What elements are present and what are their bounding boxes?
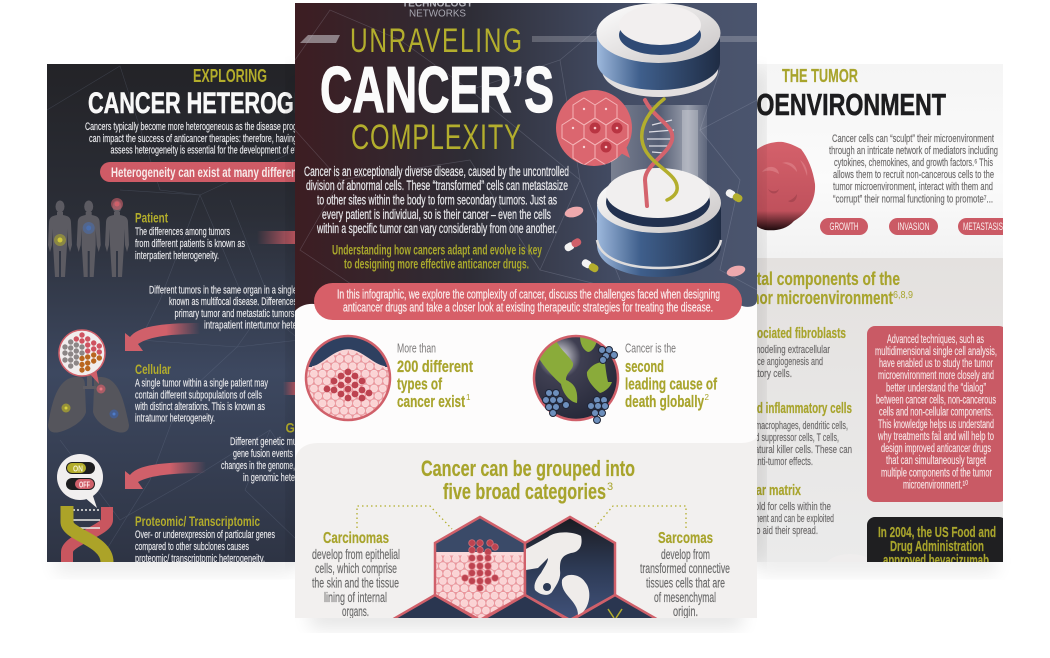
dotted connectors bbox=[357, 506, 686, 529]
text block: sarcomas: Sarcomas bbox=[658, 530, 713, 547]
heading: vital components: 6,8,9 bbox=[893, 290, 913, 301]
illustration: dna helix bbox=[642, 99, 677, 206]
text block: genetic: in genomic hete bbox=[243, 472, 295, 484]
key message: Understanding how cancers adapt and evolve is key bbox=[332, 242, 542, 258]
text block: extracellular matrix: A scaffold for cells within the bbox=[731, 501, 831, 513]
text block: fibroblasts: Cancer-associated fibroblasts bbox=[703, 326, 846, 342]
intro text bbox=[829, 133, 998, 206]
network mesh bbox=[295, 10, 757, 295]
text block: carcinomas: organs. bbox=[342, 604, 369, 619]
text block: patient: interpatient heterogeneity. bbox=[135, 250, 219, 262]
intro text: Cancer is an exceptionally diverse disease, caused by the uncontrolled bbox=[304, 164, 569, 179]
text block: cellular: Cellular bbox=[135, 361, 171, 377]
text block: tissue: known as multifocal disease. Differences bbox=[169, 296, 297, 308]
banner: heterogeneity levels: Heterogeneity can exist at many differen bbox=[111, 165, 297, 180]
stat: 200 types of cancer: 200 different bbox=[397, 357, 473, 376]
heading: five broad categories: 3 bbox=[607, 481, 613, 493]
text block: fibroblasts: matrix, induce angiogenesis and bbox=[720, 356, 823, 368]
heading: vital components: tumor microenvironment bbox=[735, 288, 893, 308]
arrow: genetic to proteomic bbox=[125, 462, 206, 489]
callout: advanced techniques: multiple components of the tumor bbox=[881, 468, 992, 480]
arrow stub: patient bbox=[257, 231, 297, 244]
icon: tumor cell bbox=[757, 142, 816, 230]
banner: infographic scope: In this infographic, we explore the complexity of cancer, discuss the challenges faced when designing bbox=[337, 286, 720, 302]
text block: cellular: contain different subpopulations of cells bbox=[135, 390, 262, 402]
stat: second leading cause of death: second bbox=[625, 357, 664, 376]
text block: carcinomas: cells, which comprise bbox=[315, 561, 397, 576]
banner: infographic scope bbox=[314, 283, 742, 320]
text block: sarcomas: transformed connective bbox=[640, 561, 730, 576]
stat: 200 types of cancer: cancer exist bbox=[397, 392, 465, 411]
logo: technology networks bbox=[404, 3, 471, 16]
text block: genetic: changes in the genome, bbox=[221, 460, 295, 472]
intro text bbox=[304, 164, 569, 236]
callout: advanced techniques: microenvironment.¹⁰ bbox=[903, 480, 968, 492]
text block: immune cells: myeloid suppressor cells, T cells, bbox=[735, 432, 839, 444]
banner: infographic scope: anticancer drugs and take a closer look at existing therapeutic strategies for treating the disease. bbox=[343, 300, 713, 314]
left panel background bbox=[47, 64, 297, 562]
text block: proteomic transcriptomic: compared to other subclones causes bbox=[135, 541, 249, 553]
panel: five broad categories bbox=[295, 437, 757, 658]
text block: tissue: Different tumors in the same organ in a single bbox=[149, 284, 297, 296]
text block: proteomic transcriptomic: Proteomic/ Transcriptomic bbox=[135, 513, 260, 529]
icon: lungs with magnified tumor cells bbox=[48, 330, 129, 433]
intro text: within a specific tumor can vary considerably from one another. bbox=[316, 221, 557, 236]
icon: tissue with tumor bbox=[305, 335, 391, 421]
heading: five broad categories bbox=[421, 456, 635, 504]
stat: 200 types of cancer: More than bbox=[397, 342, 436, 356]
heading: the tumor: THE TUMOR bbox=[782, 66, 858, 86]
text block: carcinomas: lining of internal bbox=[324, 590, 387, 605]
logo: technology networks: NETWORKS bbox=[409, 8, 466, 20]
text block: immune cells: and natural killer cells. These can bbox=[735, 444, 852, 456]
stat: second leading cause of death: Cancer is the bbox=[625, 342, 676, 356]
text block: immune cells: have anti-tumor effects. bbox=[735, 456, 813, 468]
pills: growth invasion metastasis: INVASION bbox=[898, 221, 930, 233]
stat: second leading cause of death: death globally bbox=[625, 392, 704, 411]
shadow: side and centre cards bbox=[55, 548, 997, 628]
text block: genetic: gene fusion events bbox=[233, 448, 293, 460]
title: CANCER’S bbox=[320, 53, 554, 126]
callout: advanced techniques: design improved anticancer drugs bbox=[881, 443, 991, 455]
text block: fibroblasts bbox=[757, 326, 846, 380]
text block: carcinomas bbox=[312, 530, 400, 619]
decorative title stripes bbox=[300, 35, 757, 43]
text block: carcinomas: Carcinomas bbox=[323, 530, 389, 547]
text block: immune cells: Include macrophages, dendritic cells, bbox=[730, 420, 848, 432]
text block: patient: from different patients is known as bbox=[135, 238, 245, 250]
icon: bubble with cell hexagons bbox=[556, 90, 632, 166]
stat: second leading cause of death bbox=[625, 342, 717, 411]
text block: fibroblasts: Aid in remodeling extracellular bbox=[725, 344, 830, 356]
key message: to designing more effective anticancer drugs. bbox=[344, 256, 529, 272]
stat: second leading cause of death: 2 bbox=[704, 393, 710, 402]
stat: 200 types of cancer: types of bbox=[397, 374, 442, 394]
hexagon: sarcoma bone bbox=[525, 517, 615, 620]
icon: three human silhouettes bbox=[48, 198, 129, 277]
network mesh bbox=[47, 66, 300, 560]
text block: proteomic transcriptomic: Over- or underexpression of particular genes bbox=[135, 529, 275, 541]
pills: growth invasion metastasis: GROWTH bbox=[830, 221, 859, 233]
text block: sarcomas: tissues cells that are bbox=[646, 576, 725, 590]
hexagon row below bbox=[390, 595, 660, 658]
title: COMPLEXITY bbox=[351, 118, 521, 157]
heading: five broad categories: five broad categories bbox=[443, 479, 606, 504]
panel: the tumor microenvironment bbox=[757, 64, 1003, 562]
panel: unraveling cancer's complexity bbox=[295, 0, 757, 658]
icon: on off toggles speech bubble: ON bbox=[73, 464, 83, 474]
text block: sarcomas: of mesenchymal bbox=[654, 590, 716, 605]
icon: on off toggles speech bubble: OFF bbox=[79, 480, 90, 490]
decorative bump at bottom bbox=[826, 554, 874, 578]
text block: immune cells bbox=[757, 402, 852, 466]
callout: advanced techniques bbox=[867, 326, 1007, 502]
title bbox=[320, 22, 554, 157]
text block: extracellular matrix bbox=[757, 484, 834, 537]
callout: advanced techniques: that can simultaneously target bbox=[886, 455, 987, 467]
text block: cellular bbox=[134, 361, 268, 424]
callout: bevacizumab: Drug Administration bbox=[890, 538, 984, 555]
banner: heterogeneity levels bbox=[100, 162, 295, 182]
text block: cellular: intratumor heterogeneity. bbox=[135, 412, 215, 424]
hexagon marker bbox=[608, 609, 622, 618]
panel: exploring cancer heterogeneity bbox=[47, 64, 295, 562]
intro text bbox=[85, 121, 297, 156]
text block: sarcomas bbox=[640, 530, 730, 619]
pills: growth invasion metastasis: METASTASIS bbox=[963, 221, 1003, 233]
text block: fibroblasts: inflammatory cells. bbox=[724, 368, 792, 380]
heading: cancer heterogeneity: CANCER HETEROGENEITY bbox=[88, 87, 372, 120]
text block: patient: The differences among tumors bbox=[135, 226, 230, 238]
heading: five broad categories: Cancer can be grouped into bbox=[421, 456, 635, 481]
centre panel lower background bbox=[295, 300, 757, 462]
arrow: tissue to cellular bbox=[125, 323, 200, 351]
icon: on off toggles speech bubble bbox=[57, 454, 103, 508]
heading: microenvironment: MICROENVIRONMENT bbox=[697, 87, 946, 122]
header background bbox=[295, 3, 757, 311]
heading: vital components bbox=[757, 271, 913, 304]
heading: vital components: Vital components of the bbox=[744, 269, 900, 289]
illustration: glass cylinder with dna bbox=[611, 105, 707, 195]
text block: tissue bbox=[149, 284, 297, 332]
text block: extracellular matrix: Extracellular matrix bbox=[702, 483, 801, 499]
text block: sarcomas: origin. bbox=[673, 604, 698, 619]
arrow stub: cellular bbox=[284, 382, 295, 395]
callout: advanced techniques: Advanced techniques, such as bbox=[887, 334, 984, 346]
text block: tissue: intrapatient intertumor hete bbox=[204, 320, 297, 332]
text block: patient: Patient bbox=[135, 210, 168, 226]
text block: proteomic transcriptomic: proteomic/ transcriptomic heterogeneity. bbox=[135, 553, 265, 565]
icon: dna strand bbox=[67, 506, 107, 562]
stat: 200 types of cancer bbox=[397, 342, 473, 411]
icons: pills bbox=[563, 188, 746, 278]
intro text: Cancers typically become more heterogeneous as the disease prog bbox=[85, 121, 297, 133]
text block: extracellular matrix: by tumors to aid their spread. bbox=[718, 525, 818, 537]
callout: bevacizumab: approved bevacizumab bbox=[883, 552, 989, 569]
intro text: division of abnormal cells. These “transformed” cells can metastasize bbox=[306, 178, 568, 193]
text block: carcinomas: the skin and the tissue bbox=[312, 576, 399, 590]
right panel background bbox=[750, 64, 1003, 562]
text block: cellular: A single tumor within a single patient may bbox=[135, 378, 268, 390]
intro text: assess heterogeneity is essential for the development of ef bbox=[110, 144, 297, 156]
intro text: every patient is individual, so is their cancer – even the cells bbox=[322, 207, 551, 222]
text block: cellular: with distinct alterations. This is known as bbox=[134, 401, 265, 413]
callout: advanced techniques: better understand the “dialog” bbox=[886, 382, 986, 394]
pills: growth invasion metastasis bbox=[820, 218, 1018, 235]
illustration: lower platform bbox=[597, 168, 721, 277]
callout: advanced techniques: why treatments fail and will help to bbox=[877, 431, 994, 443]
intro text: can impact the success of anticancer therapies: therefore, having bbox=[89, 133, 297, 145]
key message bbox=[332, 242, 542, 272]
text block: proteomic transcriptomic bbox=[135, 516, 275, 562]
text block: immune cells: Immune and inflammatory cells bbox=[705, 401, 852, 417]
text block: extracellular matrix: environment and can be exploited bbox=[731, 513, 834, 525]
hexagon: carcinoma tissue bbox=[435, 517, 525, 621]
text block: tissue: primary tumor and metastatic tumors bbox=[174, 308, 295, 320]
heading: exploring: EXPLORING bbox=[193, 66, 267, 86]
callout: bevacizumab bbox=[867, 517, 1003, 562]
text block: patient bbox=[135, 210, 245, 262]
text block: genetic bbox=[221, 423, 295, 484]
text block: genetic: Different genetic mu bbox=[230, 436, 297, 448]
title: UNRAVELING bbox=[350, 22, 522, 60]
shadow: centre card on side cards bbox=[288, 70, 764, 560]
text block: genetic: Ge bbox=[286, 420, 302, 436]
icon: globe with cells bbox=[534, 336, 618, 424]
illustration: upper platform bbox=[596, 3, 720, 97]
stat: 200 types of cancer: 1 bbox=[466, 393, 471, 402]
text block: sarcomas: develop from bbox=[661, 547, 710, 562]
intro text: to other sites within the body to form secondary tumors. Just as bbox=[317, 192, 557, 208]
stat: second leading cause of death: leading cause of bbox=[625, 374, 717, 394]
text block: carcinomas: develop from epithelial bbox=[312, 547, 400, 562]
